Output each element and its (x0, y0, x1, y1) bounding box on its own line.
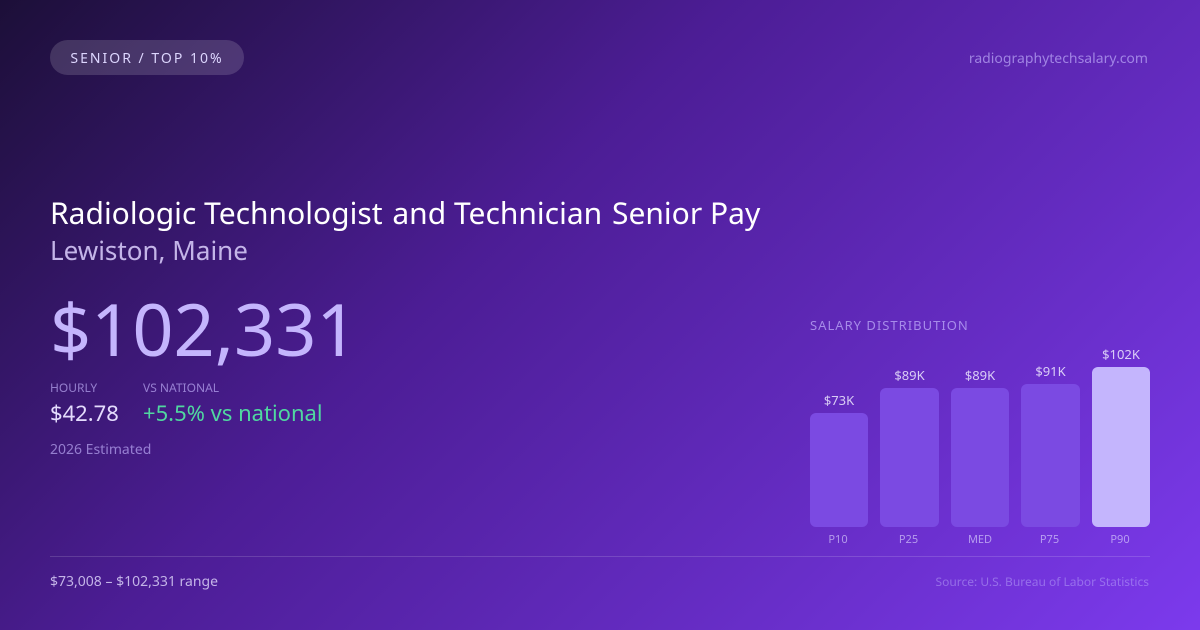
percentile label: MED (968, 532, 992, 547)
site name: radiographytechsalary.com (969, 49, 1148, 68)
bar (1092, 367, 1150, 527)
value label: $91K (1035, 362, 1066, 380)
bar column: P90 highlighted (1092, 345, 1150, 547)
percentile label: P25 (899, 532, 918, 547)
bar column: P10 (810, 391, 868, 547)
bar (880, 388, 939, 527)
hourly label: HOURLY (50, 379, 97, 396)
percentile label: P90 (1110, 532, 1130, 547)
bar (1021, 384, 1080, 527)
stat: hourly (50, 379, 119, 428)
range footer: $73,008 – $102,331 range (50, 572, 218, 591)
percentile label: P75 (1040, 532, 1059, 547)
location subtitle: Lewiston, Maine (50, 232, 248, 268)
hourly value: $42.78 (50, 398, 119, 428)
title: Radiologic Technologist and Technician Senior Pay (50, 192, 760, 233)
source footer: Source: U.S. Bureau of Labor Statistics (936, 573, 1149, 590)
badge: senior / top 10%: SENIOR / TOP 10% (70, 49, 224, 68)
vs national label: VS NATIONAL (143, 379, 219, 396)
chart heading: SALARY DISTRIBUTION (810, 316, 969, 334)
value label: $73K (824, 391, 854, 409)
percentile label: P10 (828, 532, 848, 547)
badge: senior / top 10% (50, 40, 244, 75)
main salary figure: $102,331 (50, 280, 358, 378)
bar (951, 388, 1009, 527)
stat: vs national (143, 379, 323, 428)
value label: $89K (965, 366, 995, 384)
bar column: median (951, 366, 1009, 547)
value label: $89K (894, 366, 925, 384)
bar column: P75 (1021, 362, 1080, 547)
value label: $102K (1102, 345, 1140, 363)
bar column: P25 (880, 366, 939, 547)
bar (810, 413, 868, 527)
estimate note: 2026 Estimated (50, 440, 151, 459)
chart: salary distribution (810, 316, 1150, 547)
vs national value: +5.5% vs national (143, 398, 323, 428)
